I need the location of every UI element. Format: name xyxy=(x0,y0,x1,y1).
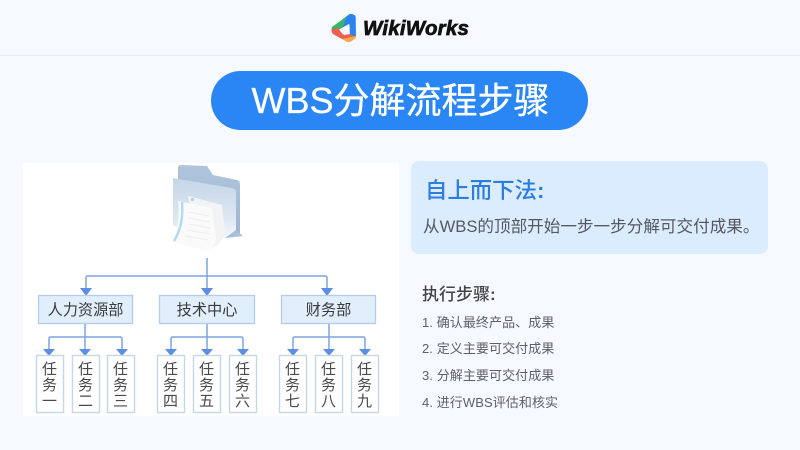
task labels: 五 xyxy=(199,393,214,410)
logo wordmark: WikiWorks xyxy=(363,17,469,40)
task labels: 二 xyxy=(78,393,93,410)
task labels: 任 xyxy=(78,361,93,378)
task labels xyxy=(42,361,372,410)
task labels: 四 xyxy=(163,393,178,410)
task labels: 任 xyxy=(113,361,128,378)
panel: WBS org chart xyxy=(23,163,399,416)
steps heading: 执行步骤: xyxy=(422,285,496,304)
task labels: 任 xyxy=(357,361,372,378)
step 3: 3. 分解主要可交付成果 xyxy=(422,368,554,383)
icon: WikiWorks logo xyxy=(332,14,356,42)
step 1: 1. 确认最终产品、成果 xyxy=(422,315,554,330)
title pill xyxy=(211,71,588,130)
task labels: 任 xyxy=(199,361,214,378)
task labels: 一 xyxy=(42,393,57,410)
task labels: 务 xyxy=(113,377,128,394)
task labels: 任 xyxy=(321,361,336,378)
task labels: 务 xyxy=(357,377,372,394)
title pill: WBS分解流程步骤 xyxy=(251,80,550,121)
header logo xyxy=(332,14,469,42)
task labels: 六 xyxy=(235,393,250,410)
panel: execution steps xyxy=(422,285,558,410)
department labels xyxy=(48,302,351,319)
task labels: 九 xyxy=(357,393,372,410)
task labels: 务 xyxy=(42,377,57,394)
task labels: 任 xyxy=(235,361,250,378)
task boxes xyxy=(36,356,378,412)
department labels: 技术中心 xyxy=(177,302,237,319)
department boxes xyxy=(38,296,376,324)
task labels: 务 xyxy=(199,377,214,394)
department labels: 人力资源部 xyxy=(48,302,123,319)
step 2: 2. 定义主要可交付成果 xyxy=(422,341,554,356)
top connector arrows xyxy=(43,258,371,356)
method description: 从WBS的顶部开始一步一步分解可交付成果。 xyxy=(423,217,759,236)
panel: top-down method xyxy=(411,161,768,254)
task labels: 任 xyxy=(42,361,57,378)
task labels: 务 xyxy=(235,377,250,394)
task labels: 务 xyxy=(321,377,336,394)
method heading: 自上而下法: xyxy=(425,178,544,203)
task labels: 务 xyxy=(78,377,93,394)
task labels: 务 xyxy=(285,377,300,394)
task labels: 任 xyxy=(163,361,178,378)
department labels: 财务部 xyxy=(306,302,351,319)
task labels: 三 xyxy=(113,393,128,410)
task labels: 任 xyxy=(285,361,300,378)
task labels: 七 xyxy=(285,393,300,410)
icon: folder with documents xyxy=(172,165,243,250)
task labels: 务 xyxy=(163,377,178,394)
step 4: 4. 进行WBS评估和核实 xyxy=(422,395,558,410)
task labels: 八 xyxy=(321,393,336,410)
